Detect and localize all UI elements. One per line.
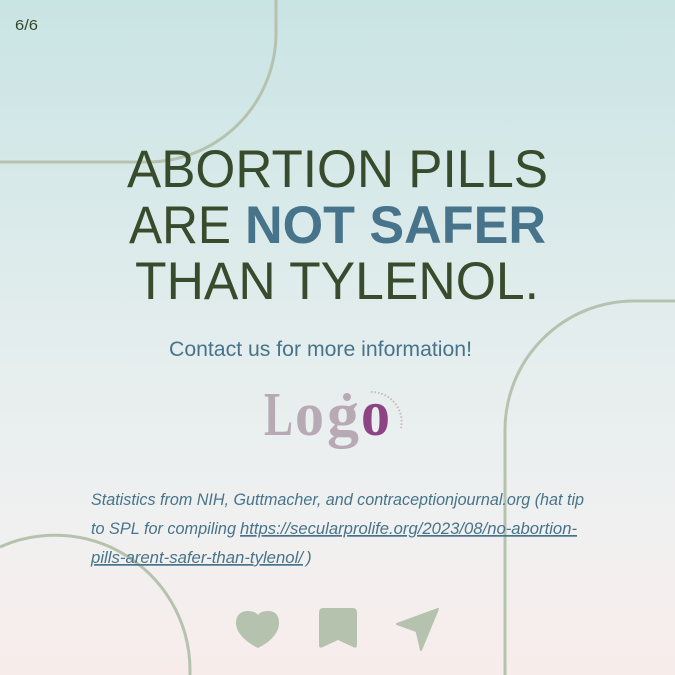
source note: ): [304, 548, 312, 567]
title: ABORTION PILLS: [127, 140, 548, 199]
logo: g: [327, 381, 359, 449]
source note: https://secularprolife.org/2023/08/no-abortion-: [240, 519, 577, 538]
contact line: Contact us for more information!: [169, 338, 472, 361]
page number: 6/6: [15, 17, 38, 34]
title: NOT SAFER: [245, 196, 546, 255]
decorative arc: bottom left: [0, 535, 190, 675]
decorative arc: top left: [0, 0, 276, 162]
decorative arc: right: [505, 301, 675, 675]
title: ARE: [129, 196, 231, 255]
logo: o: [295, 381, 324, 449]
title: [127, 140, 548, 311]
logo: [264, 377, 402, 450]
icon: bookmark: [319, 608, 357, 648]
source note: [90, 490, 584, 567]
icon: heart: [236, 611, 279, 648]
source note: to SPL for compiling: [91, 519, 237, 538]
source note: pills-arent-safer-than-tylenol/: [90, 548, 305, 567]
logo: L: [264, 381, 293, 449]
source note: Statistics from NIH, Guttmacher, and contraceptionjournal.org (hat tip: [91, 490, 584, 509]
logo: o: [361, 377, 390, 450]
icon: send arrow: [397, 609, 438, 650]
title: THAN TYLENOL.: [135, 252, 539, 311]
